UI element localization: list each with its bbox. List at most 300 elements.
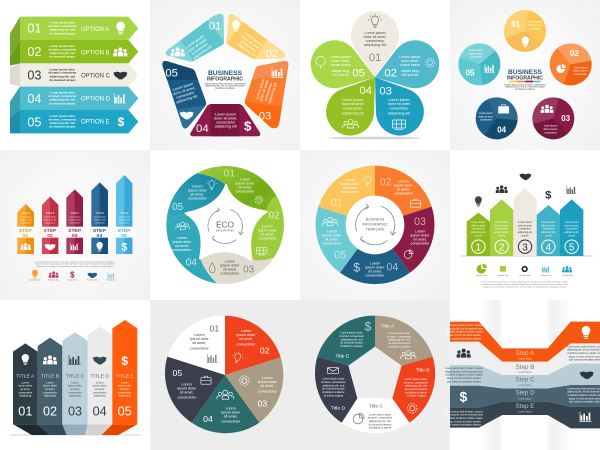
circle 05: consectetur xyxy=(470,56,482,59)
arrow 05 xyxy=(112,175,137,254)
segment 01: consectetur xyxy=(191,41,209,56)
arrow A: consectetur xyxy=(18,390,32,394)
ribbon 01: OPTION A xyxy=(81,27,109,33)
band Step A: Lorem ipsum xyxy=(518,357,532,360)
wedge 02 xyxy=(375,166,432,225)
slice 02: ipsum dolor xyxy=(237,333,256,337)
arrow 1 xyxy=(467,213,490,256)
circle 01 xyxy=(502,7,546,55)
segment 01: 01 xyxy=(209,20,221,32)
description text: Lorem ipsum dolor sit amet, consectetur adipiscing elit, sed do eiusmod tempor incididunt ut labore xyxy=(482,281,569,284)
segment D: Lorem ipsum dolor xyxy=(322,377,344,381)
ribbon 04: adipiscing elit, sed xyxy=(50,98,75,102)
arrow D: ipsum dolor xyxy=(93,384,107,388)
wedge 01: consectetur xyxy=(341,190,360,194)
arrow 5: adipiscing elit, xyxy=(564,231,579,234)
segment 05: Lorem xyxy=(192,184,203,188)
petal 05: elit sed do xyxy=(332,73,349,77)
segment E xyxy=(317,316,375,366)
segment 01: Lorem ipsum xyxy=(185,34,205,50)
arrow 03: STEP xyxy=(68,228,82,234)
arrow 01: 01 xyxy=(23,233,28,239)
segment D: sit amet, consectetur xyxy=(321,380,346,384)
segment D: adipiscing elit, sed xyxy=(322,383,345,387)
segment 03 xyxy=(200,225,274,284)
arrow 3: sed do xyxy=(521,235,529,237)
segment 04: consectetur xyxy=(173,248,192,252)
legend icons xyxy=(30,270,117,282)
band Step C xyxy=(450,363,600,388)
slice 03: sit amet, xyxy=(260,384,274,388)
circle 01: Lorem ipsum xyxy=(528,21,542,24)
arrow 2: sed do xyxy=(498,235,506,237)
arrow 02: dolor sit amet xyxy=(44,218,56,221)
arrow 02: 02 xyxy=(47,233,53,239)
panel: business ring xyxy=(300,150,450,300)
segment C: do eiusmod tempor xyxy=(369,422,391,426)
segment 03: Lorem xyxy=(225,259,235,263)
ribbon 02: sit amet, consectetur xyxy=(48,47,77,51)
segment 03: 03 xyxy=(259,110,271,122)
segment 02: Lorem xyxy=(262,225,273,229)
arrow 03: 03 xyxy=(72,233,78,239)
petal 01: adipiscing elit xyxy=(364,43,386,47)
slice 01 xyxy=(167,316,225,375)
arrow A: TITLE A xyxy=(16,373,35,379)
ribbon 01: Lorem ipsum dolor xyxy=(50,21,76,25)
band Step D: Step D xyxy=(515,390,535,397)
circle 02 xyxy=(550,35,598,92)
slice 03: ipsum dolor xyxy=(258,380,278,384)
ribbon 02: 02 xyxy=(27,45,41,59)
circle 05 xyxy=(458,35,509,87)
ribbon 05: Lorem ipsum dolor xyxy=(50,114,76,118)
ribbon 04: sit amet, consectetur xyxy=(48,94,77,98)
arrow 2: consectetur xyxy=(496,228,508,231)
center heading: adipiscing elit, sed do eiusmod tempor xyxy=(205,85,245,88)
slice 04: 04 xyxy=(203,414,213,424)
slice 03 xyxy=(225,357,283,423)
wedge 01 xyxy=(318,166,375,225)
arrow E: sit amet, xyxy=(120,387,130,391)
slice 04: consectetur xyxy=(221,420,241,424)
segment B: incididunt ut labore xyxy=(405,390,428,394)
legend icons: Sample Text xyxy=(106,279,117,282)
segment E: sit amet, consectetur xyxy=(339,334,364,338)
arrow 05: dolor sit amet xyxy=(118,218,131,221)
petal 04: adipiscing elit xyxy=(342,112,364,116)
wedge 03: Lorem xyxy=(415,230,425,234)
band Step B xyxy=(450,342,600,375)
left text blocks and icons: Lorem ipsum dolor sit amet, consect xyxy=(445,410,483,413)
segment A: adipiscing elit, sed xyxy=(388,338,411,342)
arrow 05: STEP xyxy=(117,228,131,234)
circle 01: dolor sit amet, xyxy=(528,24,543,27)
center heading: BUSINESS xyxy=(508,69,543,76)
segment 04: 04 xyxy=(186,257,197,268)
wedge 04: 04 xyxy=(386,262,398,274)
right text blocks and icons xyxy=(567,326,600,422)
segment 01: Lorem xyxy=(240,178,250,182)
segment 04: consectetur xyxy=(216,121,236,125)
left text blocks and icons: Lorem ipsum dolor sit amet, consect xyxy=(445,367,483,370)
segment 01 xyxy=(197,166,277,225)
arrow C: ipsum dolor xyxy=(68,384,82,388)
arrow C: 03 xyxy=(68,405,82,419)
arrow 2: 2 xyxy=(499,242,505,253)
left text blocks and icons: adipiscing elit, sed do eiusmod temp xyxy=(445,327,483,330)
arrow B: Lorem xyxy=(46,380,55,384)
slice 01: 01 xyxy=(210,323,219,333)
center heading: BUSINESS xyxy=(208,70,243,77)
left text blocks and icons: $ xyxy=(459,388,467,404)
center heading: Lorem ipsum dolor sit amet, consectetur xyxy=(204,82,246,85)
segment E: do eiusmod tempor xyxy=(340,341,363,345)
arrow B: consectetur xyxy=(43,390,57,394)
circle 04: Lorem ipsum xyxy=(479,112,493,115)
arrow 02: STEP xyxy=(43,228,57,234)
segment 01: dolor sit amet, xyxy=(187,37,208,54)
wedge 04: Lorem xyxy=(370,261,380,265)
circle 04: 04 xyxy=(497,125,507,134)
left text blocks and icons: quis nostrud exercitation ullamco xyxy=(447,380,482,383)
segment 02 xyxy=(225,196,284,260)
arrow 04: consectetur xyxy=(95,221,105,224)
band Step E: Lorem ipsum xyxy=(518,410,532,413)
segment 03: dolor sit amet, xyxy=(259,79,270,102)
arrow 4 xyxy=(537,205,560,256)
arrow C: TITLE C xyxy=(66,373,85,379)
arrow A: sit amet, xyxy=(20,387,31,391)
band Step C: Lorem ipsum xyxy=(518,384,532,387)
ribbon 01: do eiusmod tempor xyxy=(49,31,76,35)
left text blocks and icons: aliqua. Ut enim ad minim veniam, xyxy=(447,334,482,337)
arrow 1: Lorem ipsum xyxy=(472,221,485,224)
arrow 2: dolor sit amet, xyxy=(494,224,509,227)
segment 04: 04 xyxy=(196,123,209,135)
panel: pie chart xyxy=(150,300,300,450)
arrow 02 xyxy=(38,197,63,254)
arrow 02: consectetur xyxy=(45,221,55,224)
segment 02: Lorem ipsum xyxy=(244,32,263,47)
ribbon 05 xyxy=(20,110,138,133)
segment 04: adipiscing elit xyxy=(215,125,237,129)
segment 02: 02 xyxy=(268,210,280,221)
circle 04 xyxy=(476,90,522,145)
legend icons: Sample Text xyxy=(541,274,552,277)
petal 04 xyxy=(317,63,394,145)
center heading: Lorem ipsum dolor sit amet, consectetur xyxy=(504,83,546,86)
segment 05: consectetur xyxy=(176,90,196,100)
arrow B: TITLE B xyxy=(41,373,60,379)
band Step A: Step A xyxy=(516,350,535,357)
left text blocks and icons: Lorem ipsum dolor sit amet, consect xyxy=(445,324,483,327)
arrow 1: consectetur xyxy=(472,228,485,231)
petal 02 xyxy=(368,34,446,100)
circle 01: consectetur xyxy=(529,27,541,30)
segment 04: ipsum dolor xyxy=(173,240,192,244)
petal 05 xyxy=(304,34,382,100)
base shadow xyxy=(10,434,140,436)
segment E: Title E xyxy=(335,354,350,360)
arrow 3: Lorem ipsum xyxy=(518,221,532,224)
wedge 04: ipsum dolor xyxy=(366,265,385,269)
slice 04: sit amet, xyxy=(224,414,238,418)
segment B xyxy=(392,357,435,423)
arrow 05: TITLE E xyxy=(120,213,129,215)
panel: five circles xyxy=(450,0,600,150)
icons above arrows: $ xyxy=(545,189,552,201)
ribbon 05: 05 xyxy=(27,115,41,129)
segment C: Lorem ipsum dolor xyxy=(369,412,391,416)
ribbon 05: sit amet, consectetur xyxy=(48,117,77,121)
slice 05: ipsum dolor xyxy=(177,386,197,390)
left text blocks and icons: adipiscing elit, sed do eiusmod temp xyxy=(445,414,483,417)
arrow 2: Lorem ipsum xyxy=(495,221,508,224)
arrow D: 04 xyxy=(93,405,107,419)
ribbon 04: Lorem ipsum dolor xyxy=(50,91,76,95)
segment 05: adipiscing elit xyxy=(176,94,198,104)
arrow 01: Lorem ipsum xyxy=(20,215,32,218)
wedge 05: consectetur xyxy=(322,242,342,246)
arrow 4: Lorem ipsum xyxy=(542,221,555,224)
ribbon 04: OPTION D xyxy=(81,96,111,102)
slice 02: 02 xyxy=(260,345,270,355)
slice 04: ipsum dolor xyxy=(221,410,241,414)
arrow B: sit amet, xyxy=(45,387,55,391)
ribbon 05: $ xyxy=(118,115,125,129)
arrow 01: consectetur xyxy=(21,221,31,224)
left text blocks and icons: adipiscing elit, sed do eiusmod temp xyxy=(445,370,483,373)
wedge 03: sit amet, xyxy=(413,238,427,242)
arrow 4: 4 xyxy=(546,242,552,253)
bottom folds xyxy=(13,424,137,435)
arrow 04: 04 xyxy=(97,233,102,239)
segment 03 xyxy=(243,60,290,130)
petal 03 xyxy=(356,63,433,145)
segment A: incididunt ut labore xyxy=(388,344,411,348)
petal 02: elit sed do xyxy=(402,73,418,77)
wedge 01: 01 xyxy=(331,198,343,210)
arrow 1: adipiscing elit, xyxy=(471,231,486,234)
arrow 05: consectetur xyxy=(119,221,130,224)
arrow B xyxy=(38,338,62,424)
wedge 02: 02 xyxy=(380,176,392,188)
arrow 3: adipiscing elit, xyxy=(518,231,533,234)
segment 05: sit amet, xyxy=(190,192,204,196)
segment 05: 05 xyxy=(165,67,178,79)
petal 05: conse ctetur xyxy=(331,63,351,67)
panel: business pentagon xyxy=(150,0,300,150)
wedge 04: $ xyxy=(353,260,360,274)
ribbon 01: 01 xyxy=(27,22,41,36)
segment 02: dolor sit amet, xyxy=(240,35,262,51)
arrow 4: adipiscing elit, xyxy=(541,231,556,234)
arrow 05: Lorem ipsum xyxy=(119,215,130,218)
arrow 3: dolor sit amet, xyxy=(518,224,533,227)
circle 03: dolor sit amet, xyxy=(543,128,558,131)
circle 02: Lorem ipsum xyxy=(574,66,587,69)
segment 01: 01 xyxy=(224,169,235,180)
left folds of ribbons xyxy=(10,17,20,133)
slice 01: sit amet, xyxy=(192,341,206,345)
segment A xyxy=(375,316,433,366)
slice 01: consectetur xyxy=(190,346,210,350)
arrow 3 xyxy=(513,187,537,256)
segment 02: consectetur xyxy=(240,39,258,54)
slice 01: Lorem xyxy=(194,333,205,337)
arrow A xyxy=(13,343,38,424)
segment B: Title B xyxy=(416,367,430,373)
center heading: INFOGRAPHIC xyxy=(507,75,543,81)
ribbon 05: do eiusmod tempor xyxy=(49,125,76,129)
segment C: Title C xyxy=(369,403,384,409)
arrow C: sit amet, xyxy=(70,387,80,391)
segment A: Lorem ipsum dolor xyxy=(388,331,410,335)
segment A: sit amet, consectetur xyxy=(387,334,412,338)
petal 01: Lorem ipsum xyxy=(364,31,386,35)
petal 04: consectetur xyxy=(343,106,363,110)
arrow 02: TITLE B xyxy=(46,213,55,215)
arrow 4: consectetur xyxy=(542,228,555,231)
arrow 1: 1 xyxy=(476,242,482,253)
segment B: et dolore magna xyxy=(406,394,426,398)
segment E: adipiscing elit, sed xyxy=(341,337,363,341)
band Step D xyxy=(450,385,600,408)
arrow 04: STEP xyxy=(93,228,107,234)
slice 03: 03 xyxy=(258,399,267,409)
petal 02: conse ctetur xyxy=(400,63,421,67)
slice 05 xyxy=(165,357,225,423)
arrow 05: 05 xyxy=(121,233,127,239)
arrow D xyxy=(88,327,112,424)
arrow E: Lorem xyxy=(121,380,129,384)
segment 03: adipiscing elit xyxy=(267,82,278,104)
description text: Lorem ipsum dolor sit amet, consectetur adipiscing elit, sed do eiusmod tempor incididunt ut xyxy=(35,260,116,263)
band Step E: Step E xyxy=(515,403,534,410)
band Step D: Lorem ipsum xyxy=(518,397,532,400)
ribbon 05: adipiscing elit, sed xyxy=(50,121,75,125)
band Step C: Step C xyxy=(515,377,535,384)
wedge 05: 05 xyxy=(334,250,346,262)
wedge 05: sit amet, xyxy=(325,238,339,242)
ribbon 03: OPTION C xyxy=(81,74,111,80)
panel: flower petals xyxy=(300,0,450,150)
arrow E: 05 xyxy=(118,405,132,419)
petal 02: adipis cing xyxy=(401,69,419,73)
segment 05 xyxy=(162,60,206,128)
segment D: incididunt ut labore xyxy=(322,390,345,394)
left text blocks and icons xyxy=(445,324,483,427)
wedge 05: Lorem xyxy=(326,230,337,234)
segment C: incididunt ut labore xyxy=(369,426,392,430)
segment C: adipiscing elit, sed xyxy=(369,419,391,423)
slice 01: ipsum dolor xyxy=(190,337,210,341)
petal 04: Lorem ipsum xyxy=(342,98,363,102)
segment D: do eiusmod tempor xyxy=(322,387,345,391)
arrow 03: TITLE C xyxy=(70,213,79,215)
legend icons: Sample Text xyxy=(87,279,98,282)
panel: title arrows xyxy=(0,300,150,450)
segment 02 xyxy=(226,14,285,59)
petal 03: dolor sit amet xyxy=(388,102,410,106)
circle 02: consectetur xyxy=(575,73,587,76)
white star xyxy=(186,185,267,260)
segment 02: adipiscing elit xyxy=(236,42,256,58)
description text: et dolore magna aliqua. Ut enim ad minim veniam, quis nostrud exercitation ullamco laboris nisi ut xyxy=(482,283,568,286)
arrow E: $ xyxy=(121,354,128,368)
segment 02: consectetur xyxy=(258,237,278,241)
arrow 01 xyxy=(13,204,38,254)
segment 03: sit amet, xyxy=(223,267,237,271)
segment 05: consectetur xyxy=(188,196,208,200)
arrow 1: dolor sit amet, xyxy=(471,224,486,227)
arrow B: adipiscing xyxy=(44,394,56,398)
slice 03: Lorem xyxy=(262,376,273,380)
description text: laboris nisi ut aliquip ex ea commodo consequat. Duis aute irure dolor in reprehenderit xyxy=(37,265,113,268)
segment 05: dolor sit amet, xyxy=(173,86,196,96)
segment 04: sit amet, xyxy=(175,244,189,248)
slice 05: Lorem xyxy=(181,382,192,386)
slice 02: consectetur xyxy=(237,342,256,346)
band Step B: Step B xyxy=(515,364,534,371)
arrow D: Lorem xyxy=(96,380,104,384)
segment 03: ipsum dolor xyxy=(221,263,240,267)
wedge 03: ipsum dolor xyxy=(411,234,430,238)
slice 04: Lorem xyxy=(225,406,236,410)
segment D: Title D xyxy=(331,405,346,411)
circle 02: 02 xyxy=(570,49,579,58)
segment A: do eiusmod tempor xyxy=(388,341,411,345)
segment 05: ipsum dolor xyxy=(188,188,208,192)
ribbon 02: OPTION B xyxy=(81,50,110,56)
segment 02: sit amet, xyxy=(260,233,274,237)
arrow 5: Lorem ipsum xyxy=(565,221,578,224)
segment 02: 02 xyxy=(266,48,278,60)
arrow D: TITLE D xyxy=(90,373,109,379)
center circle with cycle: BUSINESS xyxy=(366,218,385,222)
legend icons: Sample Text xyxy=(48,279,60,282)
left text blocks and icons: incididunt ut labore et dolore magna xyxy=(445,331,483,334)
vertical soft bands xyxy=(479,300,571,450)
ribbon 03: do eiusmod tempor xyxy=(49,78,76,82)
arrow A: 01 xyxy=(18,405,32,419)
wedge 04: sit amet, xyxy=(368,269,382,273)
petal 02: Lorem ipsum xyxy=(399,55,421,59)
wedge 03: consectetur xyxy=(411,242,430,246)
petal 05: dolor amet, xyxy=(332,59,350,63)
arrow A: adipiscing xyxy=(19,394,32,398)
arrow 5: sed do xyxy=(568,235,576,237)
ribbon 04 xyxy=(20,87,138,110)
petal 01: 01 xyxy=(369,52,381,64)
petal 01 xyxy=(351,11,399,77)
arrow 01: STEP xyxy=(19,228,33,234)
center heading xyxy=(504,69,546,91)
legend icons: Sample Text xyxy=(476,274,488,277)
wedge 04 xyxy=(340,225,410,284)
petal 01: dolor sit amet, xyxy=(364,35,386,39)
center cycle and eco title: INFOGRAPHIC xyxy=(216,228,234,232)
arrow D: sit amet, xyxy=(95,387,105,391)
left text blocks and icons: aliqua. Ut enim ad minim veniam, xyxy=(447,377,482,380)
wedge 01: sit amet, xyxy=(343,186,357,190)
arrow 2 xyxy=(490,199,513,256)
petal 04: dolor sit amet xyxy=(342,102,364,106)
ribbon 02 xyxy=(20,40,138,63)
arrow 04 xyxy=(87,182,112,254)
segment 04: Lorem ipsum xyxy=(215,113,236,117)
